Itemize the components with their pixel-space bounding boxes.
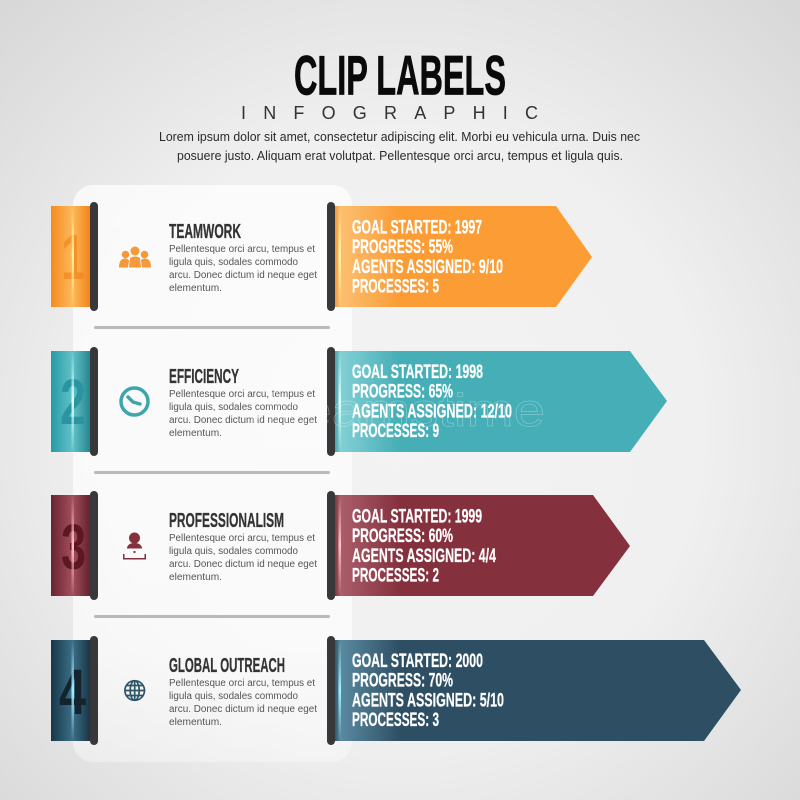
stats 2 (352, 362, 512, 442)
stats 4: AGENTS ASSIGNED: 5/10 (352, 690, 504, 712)
description 4: arcu. Donec dictum id neque eget (169, 704, 317, 715)
stats 4: GOAL STARTED: 2000 (352, 651, 483, 672)
description 1 (169, 244, 317, 294)
arrow 4 (331, 640, 741, 741)
description 4: elementum. (169, 717, 222, 728)
left clip 2 (90, 347, 98, 456)
heading: teamwork: TEAMWORK (169, 220, 241, 243)
arrow 3 (331, 495, 630, 596)
watermark: dreamstime (250, 384, 545, 436)
tab 3 with number: 3 (61, 511, 86, 583)
icon: team (119, 246, 151, 268)
right clip 1 (327, 202, 335, 311)
heading: efficiency: EFFICIENCY (169, 365, 239, 388)
tab 2 with number (51, 351, 94, 452)
title: CLIP LABELS (294, 44, 506, 106)
icon: professional (123, 532, 146, 560)
description 2: ligula quis, sodales commodo (169, 402, 298, 413)
description 4 (169, 678, 317, 728)
stats 1: PROCESSES: 5 (352, 276, 439, 298)
stats 4: PROGRESS: 70% (352, 670, 453, 692)
left clip 3 (90, 491, 98, 600)
tab 3 with number (51, 495, 94, 596)
heading: global outreach: GLOBAL OUTREACH (169, 654, 285, 677)
stats 3: AGENTS ASSIGNED: 4/4 (352, 546, 496, 567)
stats 2: GOAL STARTED: 1998 (352, 362, 483, 383)
description 1: ligula quis, sodales commodo (169, 257, 298, 268)
intro text: Lorem ipsum dolor sit amet, consectetur adipiscing elit. Morbi eu vehicula urna. Duis nec (159, 130, 640, 144)
stats 4: PROCESSES: 3 (352, 710, 439, 731)
arrow 1 (331, 206, 592, 307)
description 2: elementum. (169, 428, 222, 439)
tab 4 with number: 4 (59, 656, 86, 728)
tab 1 with number (51, 206, 94, 307)
description 1: Pellentesque orci arcu, tempus et (169, 244, 315, 255)
intro text (159, 130, 640, 163)
tab 1 with number: 1 (61, 221, 85, 293)
row 2: efficiency (51, 347, 667, 456)
row 4: global outreach (51, 636, 741, 745)
stats 3: PROCESSES: 2 (352, 566, 439, 586)
stats 2: PROCESSES: 9 (352, 421, 439, 442)
description 3: elementum. (169, 572, 222, 583)
stats 2: AGENTS ASSIGNED: 12/10 (352, 402, 512, 422)
stats 3 (352, 506, 496, 586)
left clip 1 (90, 202, 98, 311)
right clip 4 (327, 636, 335, 745)
stats 1 (352, 218, 503, 298)
description 3: ligula quis, sodales commodo (169, 546, 298, 557)
intro text: posuere justo. Aliquam erat volutpat. Pellentesque orci arcu, tempus et ligula quis. (177, 149, 623, 163)
stats 3: PROGRESS: 60% (352, 526, 453, 547)
heading: professionalism: PROFESSIONALISM (169, 509, 284, 532)
stats 1: PROGRESS: 55% (352, 237, 453, 258)
subtitle: INFOGRAPHIC (241, 103, 538, 123)
left clip 4 (90, 636, 98, 745)
stats 4 (352, 651, 504, 731)
divider 1 (94, 326, 330, 329)
description 4: ligula quis, sodales commodo (169, 691, 298, 702)
row 3: professionalism (51, 491, 630, 600)
row 1: teamwork (51, 202, 592, 311)
description 3 (169, 533, 317, 583)
stats 2: PROGRESS: 65% (352, 382, 453, 402)
stats 1: GOAL STARTED: 1997 (352, 218, 482, 238)
description 3: Pellentesque orci arcu, tempus et (169, 533, 315, 544)
icon: clock (121, 388, 148, 415)
arrow 2 (331, 351, 667, 452)
tab 2 with number: 2 (60, 366, 86, 438)
description 1: arcu. Donec dictum id neque eget (169, 270, 317, 281)
right clip 2 (327, 347, 335, 456)
stats 1: AGENTS ASSIGNED: 9/10 (352, 257, 503, 278)
panel: white card (73, 185, 352, 762)
right clip 3 (327, 491, 335, 600)
description 2: Pellentesque orci arcu, tempus et (169, 389, 315, 400)
icon: globe (125, 681, 144, 700)
description 3: arcu. Donec dictum id neque eget (169, 559, 317, 570)
description 1: elementum. (169, 283, 222, 294)
description 2 (169, 389, 317, 439)
stats 3: GOAL STARTED: 1999 (352, 506, 482, 528)
tab 4 with number (51, 640, 94, 741)
description 2: arcu. Donec dictum id neque eget (169, 415, 317, 426)
divider 3 (94, 615, 330, 618)
divider 2 (94, 471, 330, 474)
description 4: Pellentesque orci arcu, tempus et (169, 678, 315, 689)
